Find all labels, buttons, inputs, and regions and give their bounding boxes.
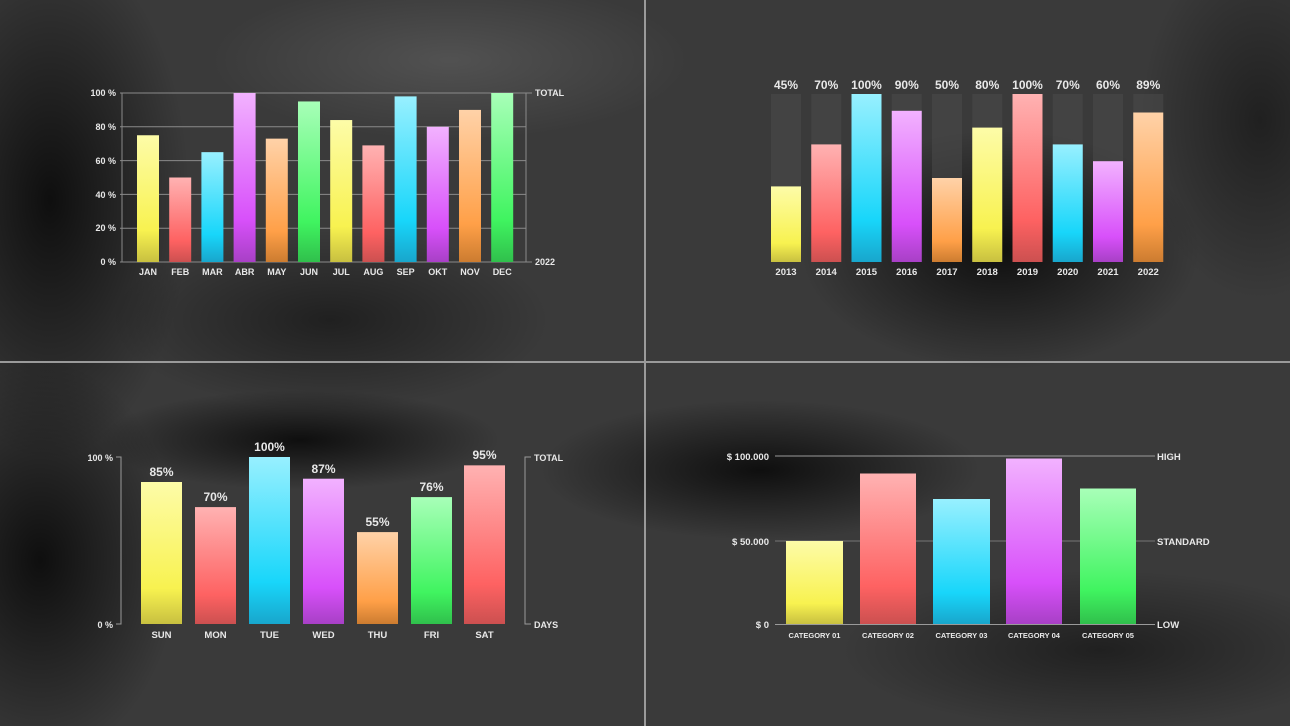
- chart: yearly percentages: 100%: [851, 78, 882, 92]
- chart: monthly percentages: ABR: [235, 267, 255, 277]
- chart: daily percentages: 0 %: [97, 620, 113, 630]
- chart: daily percentages: 55%: [365, 515, 390, 529]
- chart: daily percentages: [87, 440, 564, 641]
- chart: monthly percentages: 0 %: [100, 257, 116, 267]
- chart: yearly percentages: 60%: [1096, 78, 1120, 92]
- chart: daily percentages: MON: [204, 630, 227, 641]
- chart: yearly percentages: 70%: [814, 78, 839, 92]
- chart: monthly percentages: 20 %: [95, 223, 116, 233]
- chart: monthly percentages: JUL: [333, 267, 350, 277]
- chart: categories: [727, 452, 1210, 640]
- chart: categories: CATEGORY 01: [789, 631, 840, 640]
- chart: monthly percentages: 40 %: [95, 190, 116, 200]
- chart: monthly percentages: FEB: [171, 267, 190, 277]
- chart: monthly percentages: 60 %: [95, 156, 116, 166]
- chart: yearly percentages: 2016: [896, 267, 917, 278]
- chart: daily percentages: FRI: [424, 630, 439, 641]
- chart: categories: CATEGORY 03: [936, 631, 987, 640]
- chart: daily percentages: TUE: [260, 630, 279, 641]
- chart: monthly percentages: OKT: [428, 267, 448, 277]
- chart: daily percentages: 85%: [149, 465, 174, 479]
- chart: categories: $ 100.000: [727, 452, 769, 463]
- chart: yearly percentages: 2015: [856, 267, 878, 278]
- chart: categories: CATEGORY 05: [1082, 631, 1134, 640]
- chart: monthly percentages: NOV: [460, 267, 480, 277]
- chart: categories: $ 50.000: [732, 537, 769, 548]
- chart: categories: $ 0: [756, 620, 769, 631]
- chart: monthly percentages: 2022: [535, 257, 555, 267]
- chart: monthly percentages: [90, 88, 565, 277]
- chart: yearly percentages: 2022: [1138, 267, 1159, 278]
- chart: monthly percentages: JAN: [139, 267, 157, 277]
- chart: categories: CATEGORY 04: [1008, 631, 1061, 640]
- chart: daily percentages: WED: [312, 630, 335, 641]
- chart: categories: CATEGORY 02: [862, 631, 914, 640]
- chart: yearly percentages: 2017: [936, 267, 958, 278]
- chart: yearly percentages: 80%: [975, 78, 1000, 92]
- chart: daily percentages: SAT: [475, 630, 494, 641]
- chart: daily percentages: DAYS: [534, 620, 558, 630]
- chart: yearly percentages: 2014: [816, 267, 838, 278]
- chart: monthly percentages: DEC: [493, 267, 512, 277]
- chart: yearly percentages: 2020: [1057, 267, 1078, 278]
- chart: categories: HIGH: [1157, 452, 1181, 463]
- chart: daily percentages: 95%: [472, 448, 497, 462]
- chart: yearly percentages: [771, 78, 1163, 278]
- chart: yearly percentages: 45%: [774, 78, 798, 92]
- chart: categories: LOW: [1157, 620, 1179, 631]
- chart: daily percentages: 100%: [254, 440, 285, 454]
- chart: categories: STANDARD: [1157, 537, 1210, 548]
- chart: monthly percentages: JUN: [300, 267, 318, 277]
- chart: yearly percentages: 2021: [1097, 267, 1119, 278]
- chart: yearly percentages: 100%: [1012, 78, 1043, 92]
- chart: yearly percentages: 90%: [895, 78, 919, 92]
- chart: daily percentages: 76%: [419, 480, 444, 494]
- chart: daily percentages: 70%: [203, 490, 228, 504]
- chart: monthly percentages: 80 %: [95, 122, 116, 132]
- chart: daily percentages: TOTAL: [534, 453, 564, 463]
- chart: yearly percentages: 50%: [935, 78, 959, 92]
- chart: daily percentages: 87%: [311, 462, 336, 476]
- chart: monthly percentages: MAY: [267, 267, 286, 277]
- chart: yearly percentages: 2019: [1017, 267, 1038, 278]
- chart: monthly percentages: 100 %: [90, 88, 116, 98]
- chart: monthly percentages: MAR: [202, 267, 223, 277]
- chart: daily percentages: 100 %: [87, 453, 113, 463]
- chart: monthly percentages: TOTAL: [535, 88, 565, 98]
- chart: yearly percentages: 89%: [1136, 78, 1161, 92]
- chart: monthly percentages: SEP: [397, 267, 415, 277]
- chart: yearly percentages: 2013: [775, 267, 797, 278]
- chart: daily percentages: SUN: [151, 630, 172, 641]
- chart: yearly percentages: 2018: [977, 267, 998, 278]
- chart: yearly percentages: 70%: [1056, 78, 1080, 92]
- chart: daily percentages: THU: [368, 630, 387, 641]
- chart: monthly percentages: AUG: [363, 267, 383, 277]
